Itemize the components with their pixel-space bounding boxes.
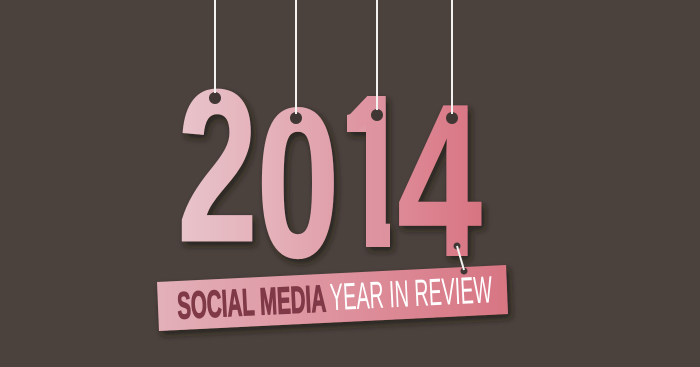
digit 0: 0 [257,64,339,301]
banner title: SOCIAL MEDIA [176,278,327,327]
digit 1: 1 [335,51,410,294]
string and hole for 2 [209,0,221,104]
string and hole for 1 [371,0,383,121]
banner title [176,270,494,327]
string and hole for 4 [446,0,458,124]
year 2014 [182,88,488,266]
banner strip [157,265,508,331]
digit 4: 4 [398,59,482,301]
banner title: YEAR IN REVIEW [329,270,494,319]
infographic canvas [157,0,514,338]
hanging strings and punched holes [209,0,458,124]
digit 2: 2 [178,45,257,286]
string and hole for 0 [290,0,302,124]
connector holes and link [454,242,468,274]
digit 1 [346,96,396,254]
banner [157,242,508,331]
